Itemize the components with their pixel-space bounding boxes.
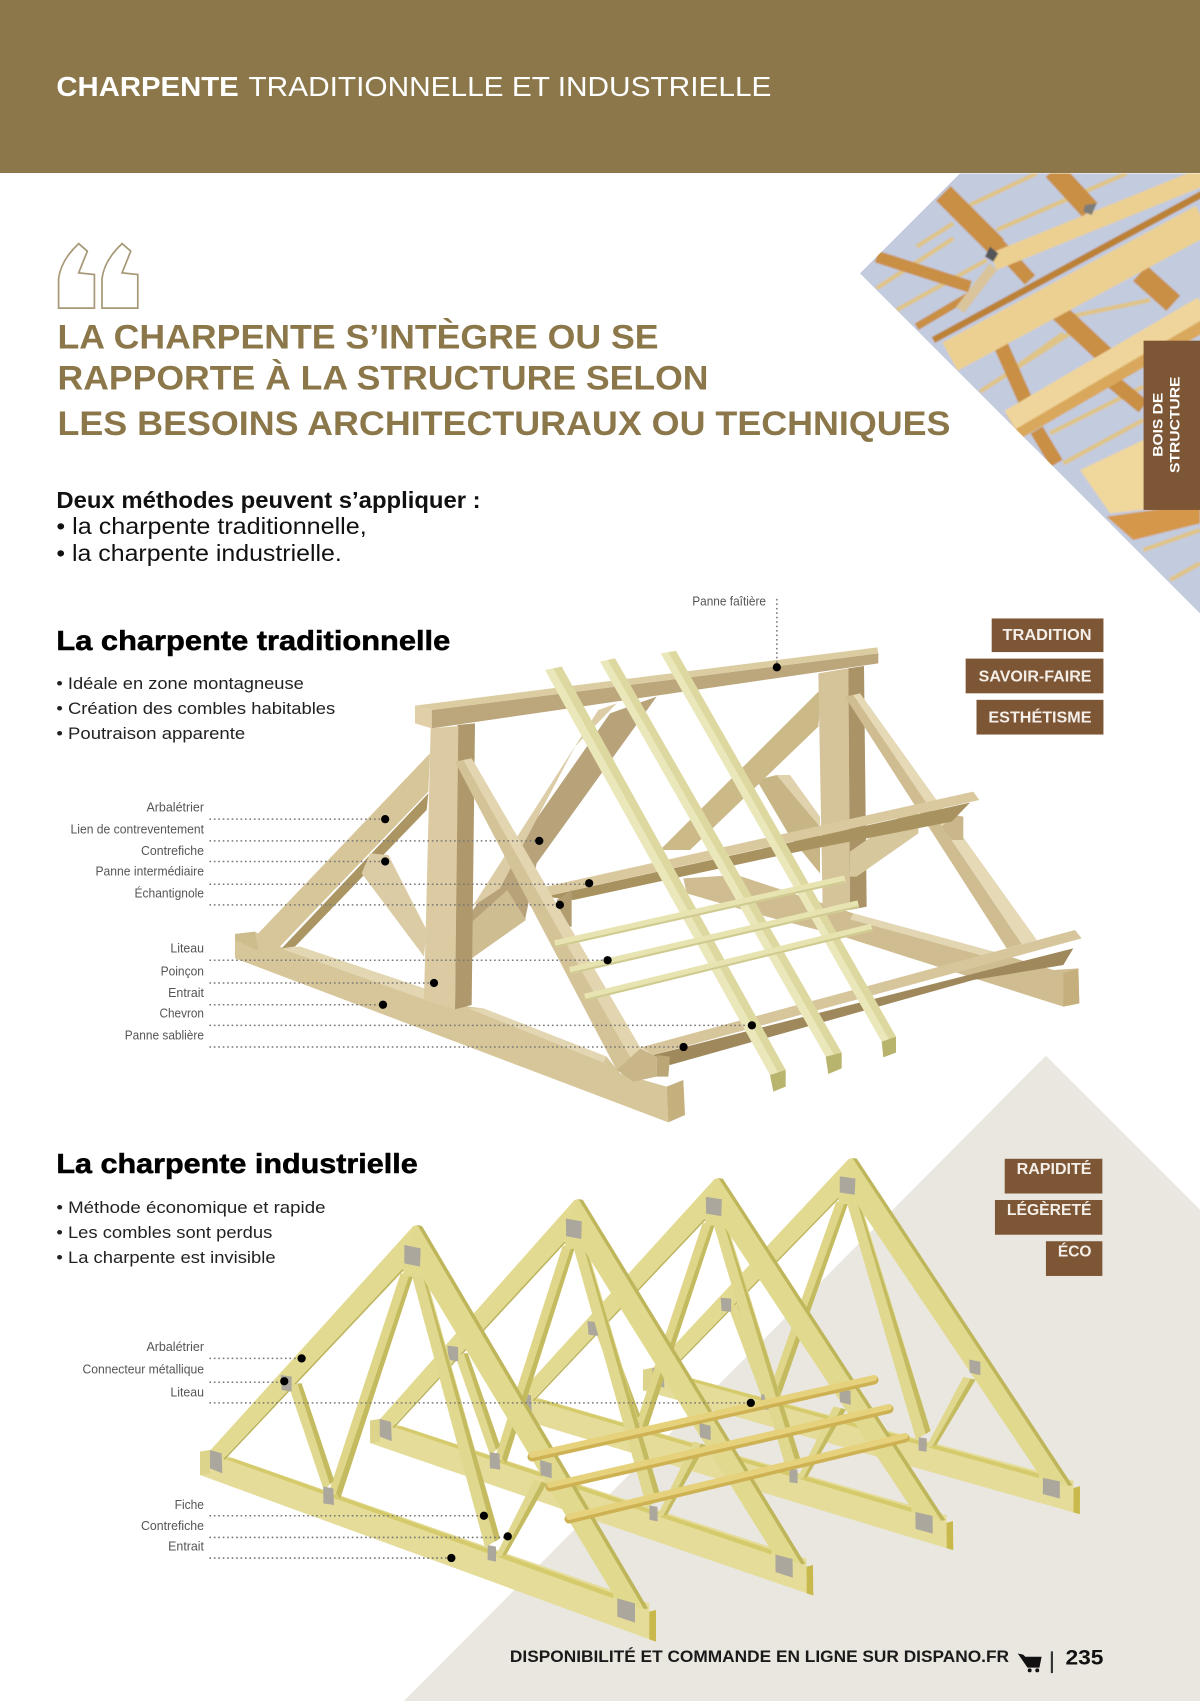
bullet list: industrielle [56,1199,325,1267]
tags: industrielle: LÉGÈRETÉ [1007,1200,1092,1219]
title: TRADITIONNELLE ET INDUSTRIELLE [248,70,771,102]
quote heading: RAPPORTE À LA STRUCTURE SELON [58,358,709,398]
intro text: • la charpente traditionnelle, [56,513,367,539]
intro text: • la charpente industrielle. [56,540,342,566]
icon: shopping cart [1018,1654,1042,1672]
tags: traditionnelle: TRADITION [1003,627,1092,644]
callout labels: industrial trusses: Fiche [175,1497,204,1512]
tags: industrielle: RAPIDITÉ [1017,1159,1092,1178]
background triangle [404,1056,1200,1701]
tags: traditionnelle: SAVOIR-FAIRE [979,668,1092,685]
illustration: traditional timber frame [235,647,1082,1122]
tags: traditionnelle [966,618,1103,735]
callout labels: traditional frame: Poinçon [161,963,204,978]
callout labels: industrial trusses [82,1339,755,1562]
callout labels: industrial trusses: Contrefiche [141,1518,204,1533]
front tie beam [235,932,685,1122]
title: CHARPENTE [56,70,239,102]
tags: industrielle: ÉCO [1058,1241,1092,1260]
intro text: Deux méthodes peuvent s’appliquer : [56,487,481,513]
front principal rafter right [455,758,657,1082]
back principal rafter [845,693,1037,948]
battens [555,879,872,1000]
bullet list: traditionnelle: • Création des combles habitables [56,700,335,718]
callout labels: industrial trusses: Connecteur métallique [82,1362,204,1377]
bullet list: traditionnelle [56,675,335,743]
bullet list: traditionnelle: • Poutraison apparente [56,725,245,743]
header band [0,0,1200,173]
callout labels: traditional frame: Contrefiche [141,843,204,858]
front principal rafter left [257,753,430,950]
photo: roof framing in diamond crop [850,170,1200,617]
side tab: bois de structure: BOIS DE [1151,393,1166,457]
tags: industrielle [995,1159,1102,1276]
quote heading: LES BESOINS ARCHITECTURAUX OU TECHNIQUES [58,405,950,443]
front king post [424,723,475,1009]
back king post [818,666,918,910]
footer: 235 [1065,1644,1103,1669]
callout labels: traditional frame: Panne intermédiaire [95,864,204,879]
callout labels: traditional frame [71,593,781,1051]
intro text [56,487,481,566]
icon: quotation marks [59,244,138,308]
callout labels: industrial trusses: Liteau [170,1384,204,1399]
callout labels: traditional frame: Panne faîtière [692,593,766,608]
side tab: bois de structure: STRUCTURE [1167,376,1182,473]
back struts [660,688,822,873]
eaves purlin [641,930,1082,1077]
back tie beam [683,875,1079,1007]
illustration: industrial trusses [200,1146,1081,1642]
callout labels: traditional frame: Panne sablière [125,1027,204,1042]
callout labels: traditional frame: Échantignole [135,885,204,900]
section heading: traditionnelle: La charpente traditionnelle [56,624,450,656]
front strut [362,853,427,957]
rafters [545,651,896,1092]
quote heading [58,316,950,443]
bullet list: traditionnelle: • Idéale en zone montagneuse [56,675,304,693]
callout labels: traditional frame: Arbalétrier [146,800,205,815]
callout labels: traditional frame: Entrait [168,985,204,1000]
intermediate purlin [538,792,979,900]
callout labels: traditional frame: Liteau [170,941,204,956]
tags: traditionnelle: ESTHÉTISME [988,708,1092,727]
bullet list: industrielle: • Les combles sont perdus [56,1224,272,1242]
ridge purlin [415,647,878,728]
callout labels: traditional frame: Chevron [159,1006,204,1021]
side tab: bois de structure [1144,341,1200,510]
bullet list: industrielle: • La charpente est invisible [56,1249,276,1267]
callout labels: traditional frame: Lien de contreventement [71,821,204,836]
section heading: industrielle: La charpente industrielle [56,1147,418,1179]
bullet list: industrielle: • Méthode économique et rapide [56,1199,326,1217]
callout labels: industrial trusses: Arbalétrier [146,1339,205,1354]
footer: DISPONIBILITÉ ET COMMANDE EN LIGNE SUR DISPANO.FR [510,1647,1009,1666]
quote heading: LA CHARPENTE S’INTÈGRE OU SE [58,316,659,356]
bracing strut [457,697,657,968]
title [56,70,771,102]
callout labels: industrial trusses: Entrait [168,1538,204,1553]
footer [510,1644,1103,1673]
